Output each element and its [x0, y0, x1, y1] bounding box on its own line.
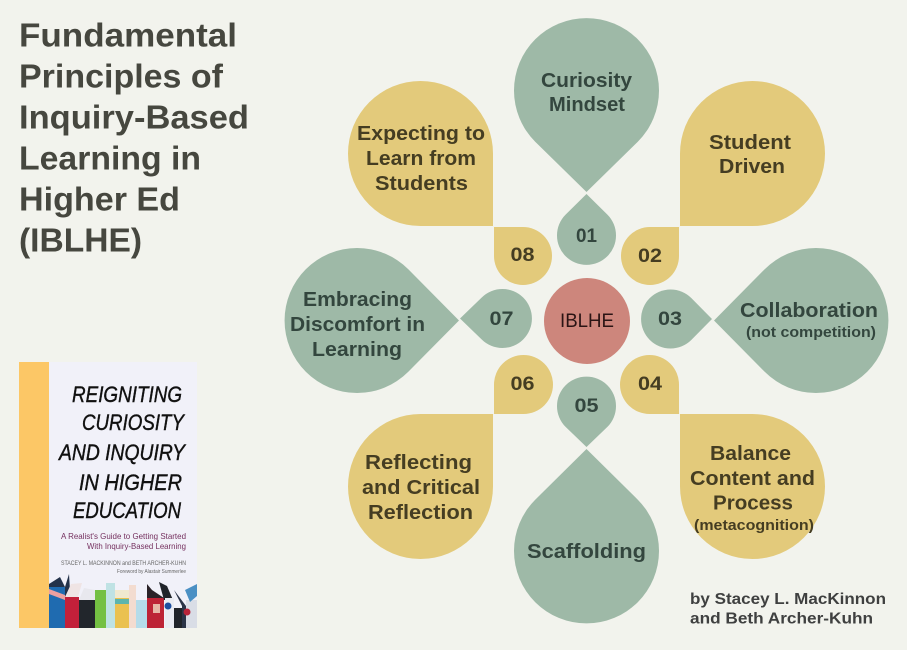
petal 02 number	[621, 227, 679, 285]
petal 03 number	[641, 290, 712, 348]
book subtitle: With Inquiry-Based Learning	[87, 541, 186, 551]
petal 04: Balance Content and Process: Content and	[690, 468, 815, 490]
title: Inquiry-Based	[19, 98, 249, 136]
petal 03 number: 03	[658, 309, 682, 330]
petal 01: Curiosity Mindset: Curiosity	[541, 70, 633, 92]
petal 04 number	[620, 355, 679, 414]
petal 04 number: 04	[638, 374, 662, 395]
center circle: IBLHE: IBLHE	[560, 311, 614, 332]
title: Fundamental	[19, 16, 237, 54]
book subtitle	[61, 531, 186, 551]
petal 07 number: 07	[490, 309, 514, 330]
title	[19, 16, 249, 258]
petal 05: Scaffolding	[514, 449, 659, 623]
petal 04: Balance Content and Process: Balance	[710, 443, 791, 465]
petal 08 number	[494, 227, 552, 285]
petal 02: Student Driven: Student	[709, 132, 791, 154]
book title: AND INQUIRY	[57, 440, 186, 465]
petal 01 number: 01	[576, 226, 597, 247]
petal 05 number: 05	[574, 396, 599, 417]
book authors	[61, 561, 186, 575]
title: Higher Ed	[19, 180, 180, 218]
petal 03: Collaboration: (not competition)	[746, 325, 876, 341]
center circle: IBLHE	[544, 278, 630, 364]
petal 06: Reflecting and Critical Reflection	[348, 414, 493, 559]
petal 02: Student Driven: Driven	[719, 156, 785, 178]
book subtitle: A Realist's Guide to Getting Started	[61, 531, 186, 541]
book spines illustration	[49, 574, 197, 628]
book title: CURIOSITY	[82, 410, 185, 435]
petal 03: Collaboration: Collaboration	[740, 300, 878, 322]
petal 08: Expecting to Learn from Students: Students	[375, 173, 468, 195]
author credit: by Stacey L. MacKinnon	[690, 591, 886, 608]
petal 06 number	[494, 355, 553, 414]
book title: REIGNITING	[72, 382, 182, 407]
petal 06 number: 06	[510, 374, 534, 395]
petal 01: Curiosity Mindset	[514, 18, 659, 192]
book title: EDUCATION	[73, 498, 181, 523]
petal 07 number	[460, 289, 532, 348]
petal 02 number: 02	[638, 246, 662, 267]
petal 01: Curiosity Mindset: Mindset	[549, 94, 625, 116]
petal 08: Expecting to Learn from Students: Learn from	[366, 148, 476, 170]
petal 08 number: 08	[510, 245, 534, 266]
petal 05: Scaffolding: Scaffolding	[527, 541, 646, 563]
petal 04: Balance Content and Process: (metacognition)	[694, 518, 814, 534]
petal 08: Expecting to Learn from Students	[348, 81, 493, 226]
author credit	[690, 591, 886, 628]
author credit: and Beth Archer-Kuhn	[690, 610, 873, 628]
petal 07: Embracing Discomfort in Learning: Discomfort in	[290, 314, 425, 336]
book cover	[19, 362, 197, 628]
petal 04: Balance Content and Process	[680, 414, 825, 559]
petal 01 number	[557, 194, 616, 265]
petal 07: Embracing Discomfort in Learning	[285, 248, 459, 393]
book title	[57, 382, 186, 523]
petal 08: Expecting to Learn from Students: Expecting to	[357, 123, 485, 145]
book authors: Foreword by Alastair Summerlee	[117, 569, 186, 575]
petal 02: Student Driven	[680, 81, 825, 226]
petal 06: Reflecting and Critical Reflection: and Critical	[362, 477, 480, 499]
petal 06: Reflecting and Critical Reflection: Reflection	[368, 502, 473, 524]
petal 03: Collaboration	[714, 248, 888, 393]
petal 07: Embracing Discomfort in Learning: Learning	[312, 339, 402, 361]
title: Principles of	[19, 58, 224, 94]
book title: IN HIGHER	[79, 470, 182, 495]
petal 06: Reflecting and Critical Reflection: Reflecting	[365, 452, 472, 474]
petal 05 number	[557, 377, 616, 447]
title: (IBLHE)	[19, 222, 142, 258]
petal 07: Embracing Discomfort in Learning: Embracing	[303, 289, 412, 311]
book authors: STACEY L. MACKINNON and BETH ARCHER-KUHN	[61, 561, 186, 567]
petal 04: Balance Content and Process: Process	[713, 492, 793, 514]
title: Learning in	[19, 140, 201, 176]
